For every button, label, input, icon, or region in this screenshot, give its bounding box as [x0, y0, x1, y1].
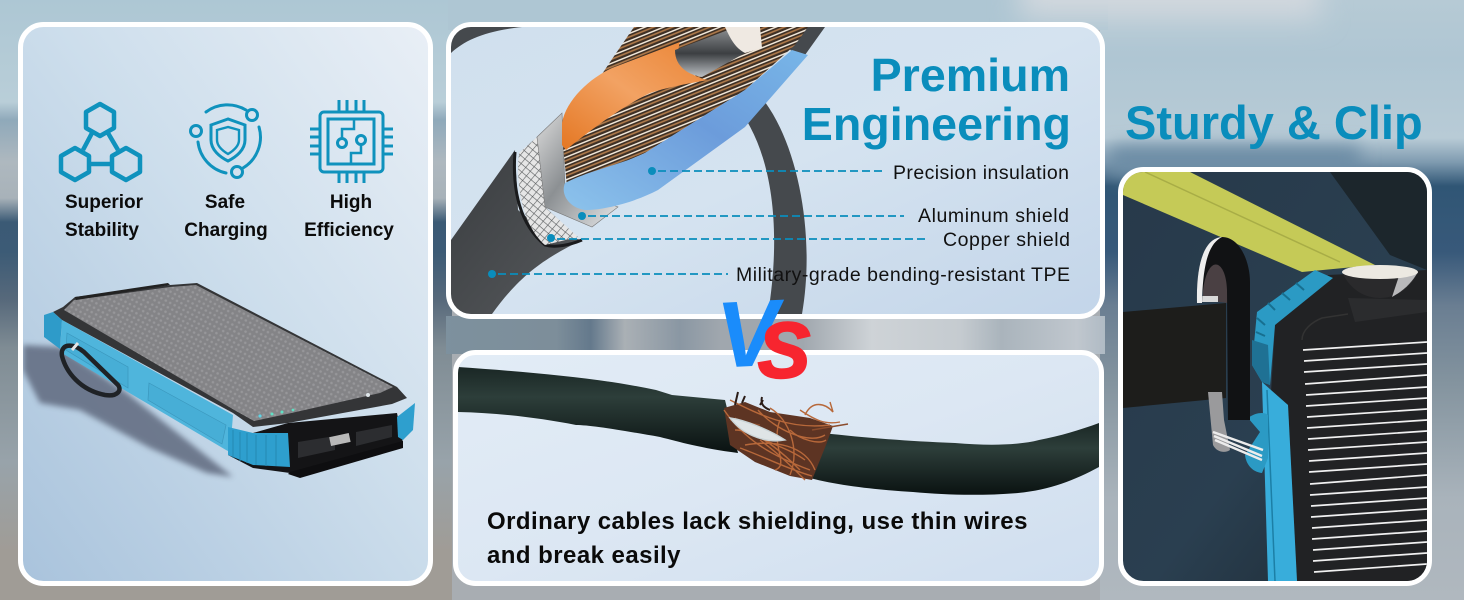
- feature label: superior stability: Stability: [65, 220, 139, 241]
- copper braid shield: [518, 137, 578, 245]
- damaged cable right piece: [810, 423, 1099, 495]
- icon: shield with orbit: [190, 105, 260, 178]
- callout: copper shield: Copper shield: [943, 229, 1070, 251]
- panel: sturdy clip photo: [1120, 170, 1430, 584]
- carabiner: [1197, 237, 1268, 473]
- panel: power bank and features: [20, 24, 430, 584]
- carabiner: [62, 346, 119, 395]
- flashlight: [1342, 274, 1414, 298]
- stranded wires: [562, 27, 808, 187]
- feature label: safe charging: Safe: [205, 192, 245, 213]
- solar power bank: [44, 283, 415, 478]
- feature label: superior stability: Superior: [65, 192, 144, 213]
- panel: premium engineering cable: [448, 24, 1102, 316]
- callout: precision insulation: Precision insulation: [893, 162, 1069, 184]
- feature label: safe charging: Charging: [184, 220, 268, 241]
- power bank body: [1271, 270, 1427, 581]
- ribbed bumper: [1252, 270, 1333, 385]
- title: premium engineering: Premium: [871, 49, 1070, 101]
- panel recess: [1348, 298, 1427, 322]
- callout: copper shield: [547, 229, 1070, 251]
- outer TPE jacket: [451, 150, 582, 314]
- blue insulation: [564, 50, 808, 210]
- caption: ordinary cable weakness: Ordinary cables lack shielding, use thin wires: [487, 508, 1028, 535]
- aluminum shield: [537, 113, 618, 227]
- orange insulation: [562, 42, 708, 150]
- frayed copper wires: [724, 392, 848, 480]
- callout: aluminum shield: Aluminum shield: [918, 205, 1069, 227]
- VS badge: [714, 279, 810, 394]
- feature label: high efficiency: Efficiency: [304, 220, 394, 241]
- icon: processor chip: [310, 100, 393, 183]
- callout: precision insulation: [648, 162, 1069, 184]
- panel: ordinary broken cable: [456, 352, 1102, 584]
- damaged cable left piece: [458, 367, 738, 453]
- VS badge: V: [714, 279, 789, 388]
- callout: TPE jacket: [488, 264, 1070, 286]
- side rail: [1262, 382, 1297, 581]
- cable loop behind: [748, 102, 807, 314]
- VS badge: S: [758, 306, 810, 394]
- callout: aluminum shield: [578, 205, 1069, 227]
- heading: sturdy and clip: Sturdy & Clip: [1125, 96, 1423, 149]
- black strap: [1123, 303, 1226, 408]
- power bank shadow: [23, 345, 233, 477]
- feature label: high efficiency: High: [330, 192, 372, 213]
- center conductor: [675, 30, 745, 77]
- icon: connected hexagons: [61, 104, 140, 180]
- title: premium engineering: Engineering: [802, 98, 1071, 150]
- caption: ordinary cable weakness: and break easily: [487, 542, 681, 569]
- solar stripes: [1303, 342, 1427, 572]
- callout: TPE jacket: Military-grade bending-resistant TPE: [736, 264, 1070, 286]
- yellow strap: [1123, 172, 1375, 272]
